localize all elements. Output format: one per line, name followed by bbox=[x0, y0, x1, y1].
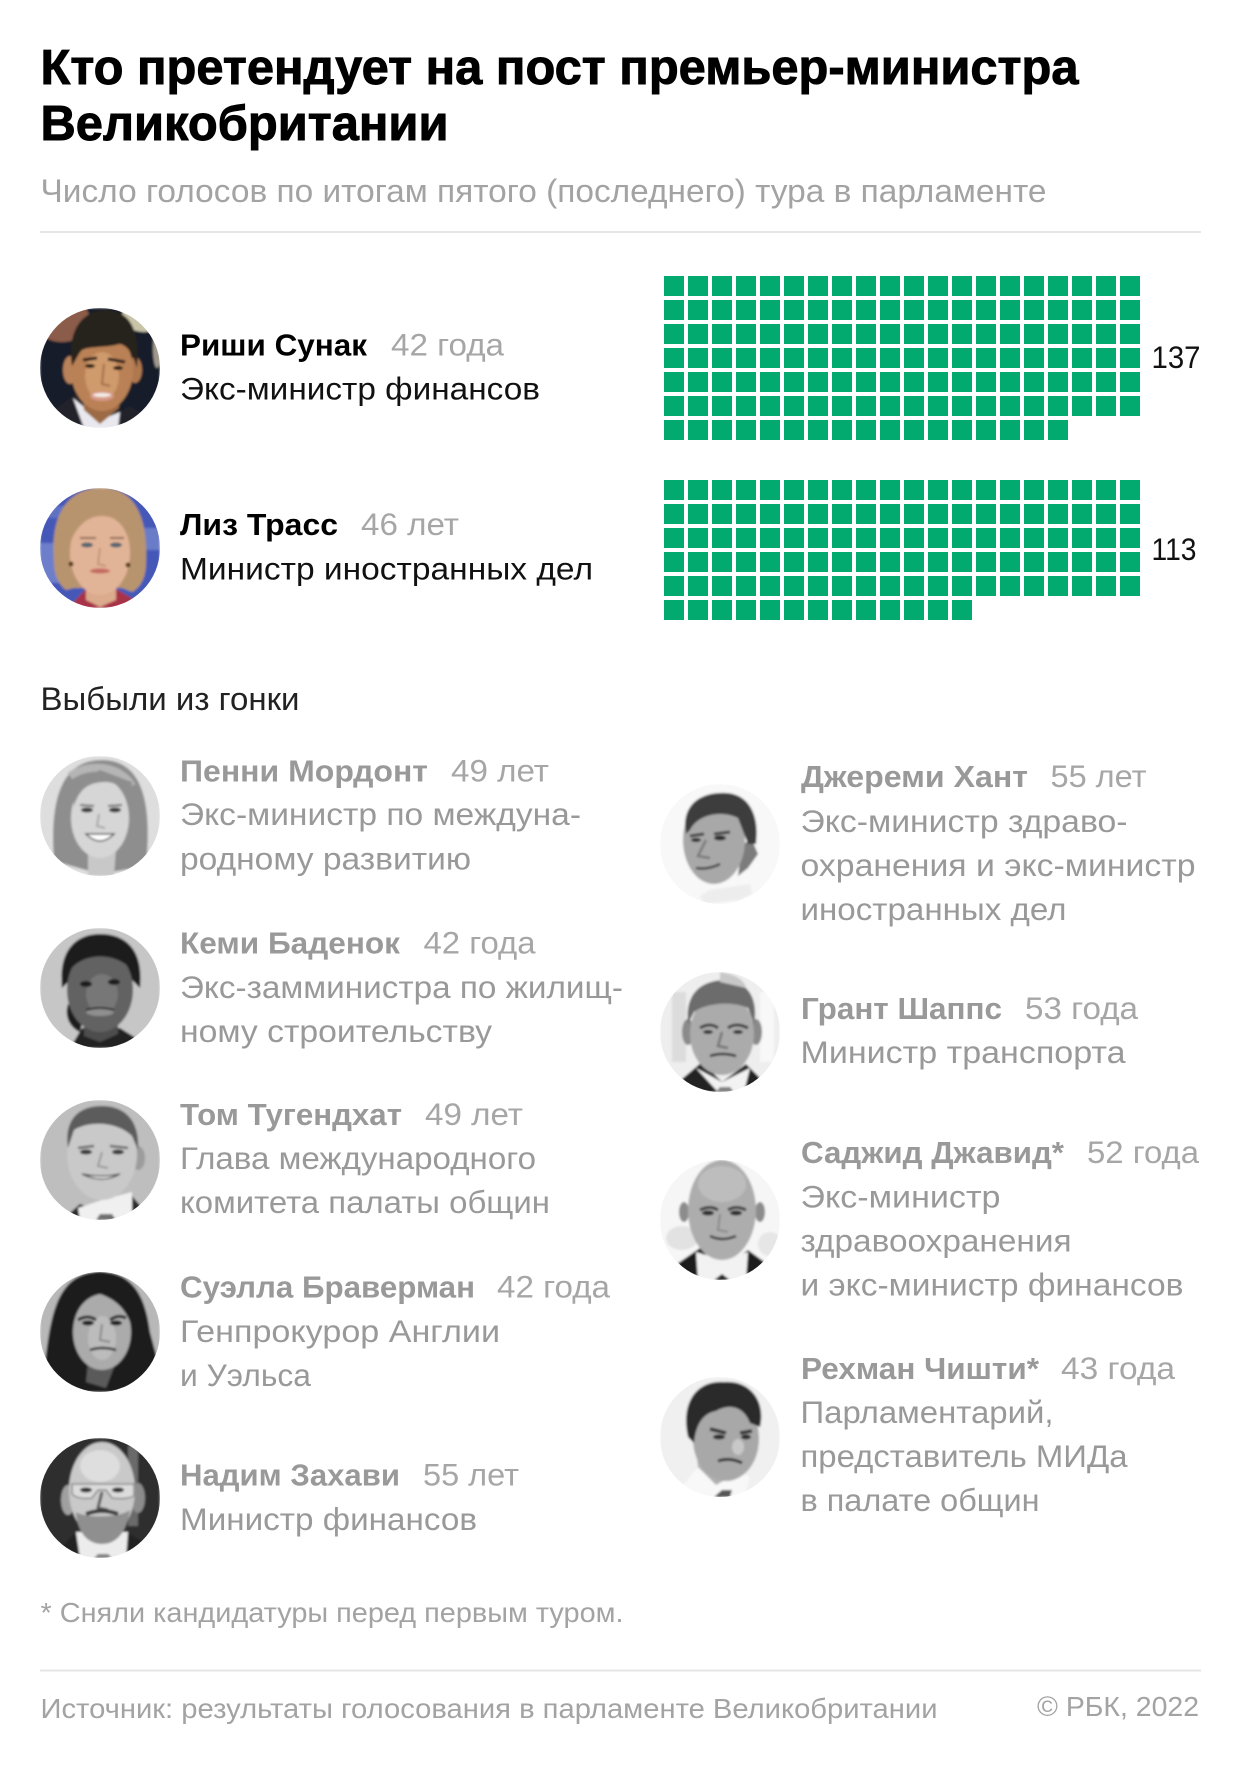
candidate: Penny Mordaunt bbox=[40, 752, 581, 876]
role: Javid: и экс-министр финансов bbox=[800, 1266, 1184, 1302]
role: Hunt bbox=[800, 803, 1196, 927]
role: Badenoch: ному строительству bbox=[180, 1013, 492, 1049]
name: Javid: Саджид Джавид* bbox=[801, 1135, 1065, 1170]
candidate: Tom Tugendhat bbox=[40, 1096, 550, 1220]
candidate: Suella Braverman bbox=[40, 1268, 611, 1393]
role: Javid bbox=[800, 1178, 1184, 1302]
name: Badenoch: Кеми Баденок bbox=[180, 926, 400, 960]
role: Truss: Министр иностранных дел bbox=[180, 550, 593, 586]
footnote: * Сняли кандидатуры перед первым туром. bbox=[40, 1597, 624, 1628]
name: Shapps: Грант Шаппс bbox=[801, 991, 1002, 1026]
age: Braverman: 42 года bbox=[497, 1268, 611, 1304]
age: Shapps: 53 года bbox=[1025, 990, 1139, 1026]
subtitle: Число голосов по итогам пятого (последнего) тура в парламенте bbox=[40, 173, 1046, 209]
portrait: Shapps bbox=[660, 972, 780, 1092]
role: Hunt: Экс-министр здраво- bbox=[800, 803, 1128, 839]
title: Кто претендует на пост премьер-министра bbox=[40, 41, 1079, 95]
value: 113: 113 bbox=[1152, 531, 1196, 567]
age: Mordaunt: 49 лет bbox=[451, 752, 549, 788]
candidate: Jeremy Hunt bbox=[660, 758, 1196, 927]
role: Braverman: и Уэльса bbox=[180, 1357, 311, 1393]
candidate: Nadhim Zahawi bbox=[40, 1438, 519, 1558]
age: Tugendhat: 49 лет bbox=[425, 1096, 523, 1132]
age: Sunak: 42 года bbox=[391, 326, 505, 362]
copyright: © РБК, 2022 bbox=[1037, 1691, 1199, 1722]
role: Chishti: представитель МИДа bbox=[800, 1438, 1128, 1474]
role: Mordaunt: родному развитию bbox=[180, 840, 471, 876]
candidate: Rehman Chishti bbox=[660, 1350, 1176, 1518]
name: Hunt: Джереми Хант bbox=[801, 759, 1028, 794]
value: 137: 137 bbox=[1152, 339, 1200, 375]
candidate: Sajid Javid bbox=[660, 1134, 1200, 1302]
role: Tugendhat: Глава международного bbox=[180, 1140, 536, 1176]
portrait: Zahawi bbox=[40, 1438, 160, 1558]
role: Tugendhat: комитета палаты общин bbox=[180, 1184, 550, 1220]
portrait: Badenoch bbox=[40, 928, 160, 1048]
age: Javid: 52 года bbox=[1087, 1134, 1200, 1170]
role: Badenoch: Экс-замминистра по жилищ- bbox=[180, 969, 623, 1005]
waffle chart: Sunak 137 votes bbox=[664, 276, 1200, 440]
title bbox=[40, 41, 1079, 151]
portrait: Tugendhat bbox=[40, 1100, 160, 1220]
candidate: Grant Shapps bbox=[660, 972, 1139, 1092]
section heading: dropped out: Выбыли из гонки bbox=[40, 681, 300, 717]
role: Javid: Экс-министр bbox=[800, 1178, 1000, 1214]
portrait: Mordaunt bbox=[40, 756, 160, 876]
role: Tugendhat bbox=[180, 1140, 550, 1220]
role: Braverman bbox=[180, 1313, 500, 1393]
name: Tugendhat: Том Тугендхат bbox=[180, 1097, 402, 1132]
source: Источник: результаты голосования в парламенте Великобритании bbox=[40, 1693, 938, 1724]
candidate: Rishi Sunak bbox=[34, 298, 540, 428]
candidate: Kemi Badenoch bbox=[40, 924, 623, 1049]
candidate: Liz Truss bbox=[40, 488, 593, 608]
name: Chishti: Рехман Чишти* bbox=[801, 1351, 1040, 1386]
portrait: Sunak bbox=[40, 308, 160, 428]
portrait: Truss bbox=[40, 488, 160, 608]
role: Shapps: Министр транспорта bbox=[800, 1034, 1126, 1070]
name: Sunak: Риши Сунак bbox=[180, 328, 367, 362]
role: Mordaunt: Экс-министр по междуна- bbox=[180, 796, 581, 832]
name: Zahawi: Надим Захави bbox=[180, 1458, 400, 1492]
portrait: Chishti bbox=[660, 1377, 780, 1497]
role: Sunak: Экс-министр финансов bbox=[180, 370, 540, 406]
age: Chishti: 43 года bbox=[1061, 1350, 1176, 1386]
role: Javid: здравоохранения bbox=[800, 1222, 1072, 1258]
title: Великобритании bbox=[40, 97, 448, 151]
role: Braverman: Генпрокурор Англии bbox=[180, 1313, 500, 1349]
age: Truss: 46 лет bbox=[361, 506, 459, 542]
role: Chishti bbox=[800, 1394, 1128, 1518]
role: Mordaunt bbox=[180, 796, 581, 876]
role: Zahawi: Министр финансов bbox=[180, 1501, 477, 1537]
portrait: Javid bbox=[660, 1160, 782, 1280]
role: Chishti: в палате общин bbox=[800, 1482, 1040, 1518]
role: Chishti: Парламентарий, bbox=[800, 1394, 1054, 1430]
portrait: Hunt bbox=[681, 790, 760, 904]
portrait: Braverman bbox=[40, 1272, 160, 1392]
role: Hunt: иностранных дел bbox=[800, 891, 1066, 927]
age: Zahawi: 55 лет bbox=[423, 1456, 519, 1492]
age: Hunt: 55 лет bbox=[1050, 758, 1146, 794]
role: Hunt: охранения и экс-министр bbox=[800, 847, 1196, 883]
role: Badenoch bbox=[180, 969, 623, 1049]
age: Badenoch: 42 года bbox=[424, 924, 536, 960]
waffle chart: Truss 113 votes bbox=[664, 480, 1196, 620]
name: Mordaunt: Пенни Мордонт bbox=[180, 754, 428, 788]
name: Braverman: Суэлла Браверман bbox=[180, 1270, 475, 1304]
name: Truss: Лиз Трасс bbox=[180, 507, 338, 542]
